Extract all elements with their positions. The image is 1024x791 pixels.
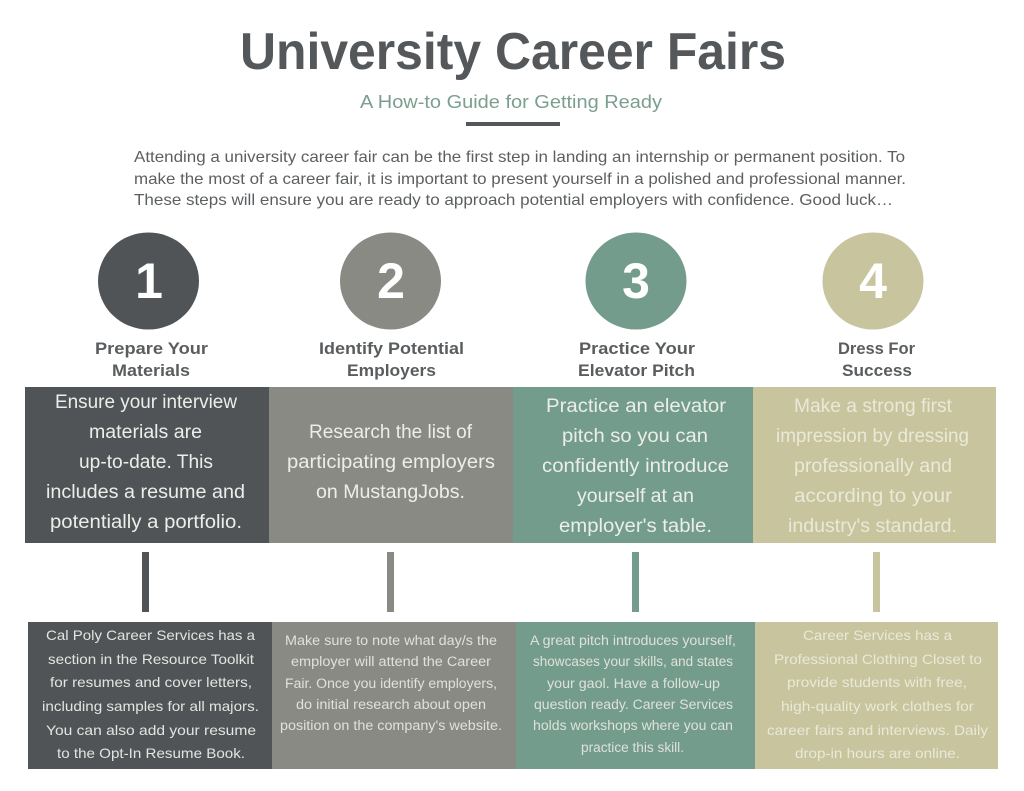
step 1 number circle: 1 <box>135 253 163 309</box>
panel: step 1 details: to the Opt-In Resume Book. <box>57 745 245 761</box>
panel: step 4 details: high-quality work clothes for <box>781 698 974 714</box>
panel: step 4 details <box>755 622 998 769</box>
step 1 heading <box>95 339 208 380</box>
connector: step 2 <box>387 552 394 612</box>
panel: step 1 details: including samples for all majors. <box>42 698 259 714</box>
step 2 number circle: 2 <box>377 253 405 309</box>
panel: step 1 details: for resumes and cover letters, <box>50 674 252 690</box>
panel: step 3 summary: employer's table. <box>559 516 712 537</box>
panel: step 3 summary: Practice an elevator <box>546 396 727 417</box>
panel: step 4 details: Career Services has a <box>803 627 952 643</box>
panel: step 4 summary: industry's standard. <box>788 516 957 537</box>
panel: step 4 summary: according to your <box>794 486 953 507</box>
panel: step 3 details <box>516 622 755 769</box>
step 4 heading <box>838 339 915 380</box>
panel: step 2 summary: participating employers <box>287 452 495 473</box>
panel: step 1 details: section in the Resource Toolkit <box>48 651 254 667</box>
panel: step 1 details: You can also add your resume <box>46 722 256 738</box>
panel: step 4 details: provide students with free, <box>787 674 967 690</box>
panel: step 2 details: employer will attend the Career <box>291 654 492 669</box>
panel: step 2 summary: Research the list of <box>309 422 473 443</box>
panel: step 3 summary: confidently introduce <box>542 456 729 477</box>
panel: step 3 details: your gaol. Have a follow-up <box>547 676 720 691</box>
intro text block <box>134 149 906 209</box>
step 4 heading: Dress For <box>838 339 915 358</box>
intro text block: These steps will ensure you are ready to approach potential employers with confidence. Good luck… <box>134 192 893 209</box>
step 3 heading: Elevator Pitch <box>578 361 695 380</box>
panel: step 3 summary: yourself at an <box>577 486 694 507</box>
panel: step 1 summary: Ensure your interview <box>55 392 237 413</box>
title: University Career Fairs <box>240 23 786 81</box>
step 2 heading: Identify Potential <box>319 339 464 358</box>
panel: step 1 details <box>28 622 272 769</box>
panel: step 4 details: career fairs and interviews. Daily <box>767 722 988 738</box>
panel: step 2 details: position on the company's website. <box>280 718 502 733</box>
intro text block: make the most of a career fair, it is important to present yourself in a polished and professional manner. <box>134 171 906 188</box>
panel: step 2 details: Fair. Once you identify employers, <box>285 676 497 691</box>
panel: step 1 details: Cal Poly Career Services has a <box>46 627 255 643</box>
panel: step 1 summary: potentially a portfolio. <box>50 512 242 533</box>
panel: step 2 summary: on MustangJobs. <box>316 482 465 503</box>
panel: step 4 summary: impression by dressing <box>776 426 969 447</box>
step 2 heading: Employers <box>347 361 436 380</box>
panel: step 2 details: Make sure to note what day/s the <box>285 633 497 648</box>
step 4 heading: Success <box>842 361 912 380</box>
step 1 heading: Prepare Your <box>95 339 208 358</box>
panel: step 3 details: holds workshops where you can <box>533 718 733 733</box>
connector: step 1 <box>142 552 149 612</box>
connector: step 3 <box>632 552 639 612</box>
panel: step 3 details: A great pitch introduces yourself, <box>530 633 736 648</box>
step 1 heading: Materials <box>112 361 190 380</box>
panel: step 3 details: practice this skill. <box>581 740 684 755</box>
panel: step 4 details: Professional Clothing Closet to <box>774 651 982 667</box>
panel: step 4 summary: Make a strong first <box>794 396 953 417</box>
panel: step 1 summary <box>25 387 269 543</box>
title underline <box>466 122 560 126</box>
panel: step 4 summary: professionally and <box>794 456 952 477</box>
intro text block: Attending a university career fair can be the first step in landing an internship or permanent position. To <box>134 149 905 166</box>
step 3 number circle <box>586 232 686 330</box>
panel: step 3 details: question ready. Career Services <box>534 697 733 712</box>
panel: step 1 summary: up-to-date. This <box>79 452 213 473</box>
panel: step 2 details: do initial research about open <box>296 697 486 712</box>
panel: step 2 details <box>272 622 516 769</box>
step 2 heading <box>319 339 464 380</box>
step 3 heading: Practice Your <box>579 339 695 358</box>
connector: step 4 <box>873 552 880 612</box>
step 2 number circle <box>340 232 441 330</box>
step 4 number circle <box>822 232 924 330</box>
step 3 number circle: 3 <box>622 253 650 309</box>
step 1 number circle <box>98 232 199 330</box>
panel: step 3 summary <box>513 387 753 543</box>
panel: step 2 summary <box>269 387 513 543</box>
step 3 heading <box>578 339 695 380</box>
panel: step 3 details: showcases your skills, and states <box>533 654 733 669</box>
step 4 number circle: 4 <box>859 253 887 309</box>
panel: step 4 summary <box>753 387 996 543</box>
subtitle: A How-to Guide for Getting Ready <box>360 92 662 112</box>
panel: step 4 details: drop-in hours are online. <box>795 745 960 761</box>
panel: step 1 summary: includes a resume and <box>46 482 245 503</box>
panel: step 3 summary: pitch so you can <box>562 426 708 447</box>
panel: step 1 summary: materials are <box>89 422 202 443</box>
